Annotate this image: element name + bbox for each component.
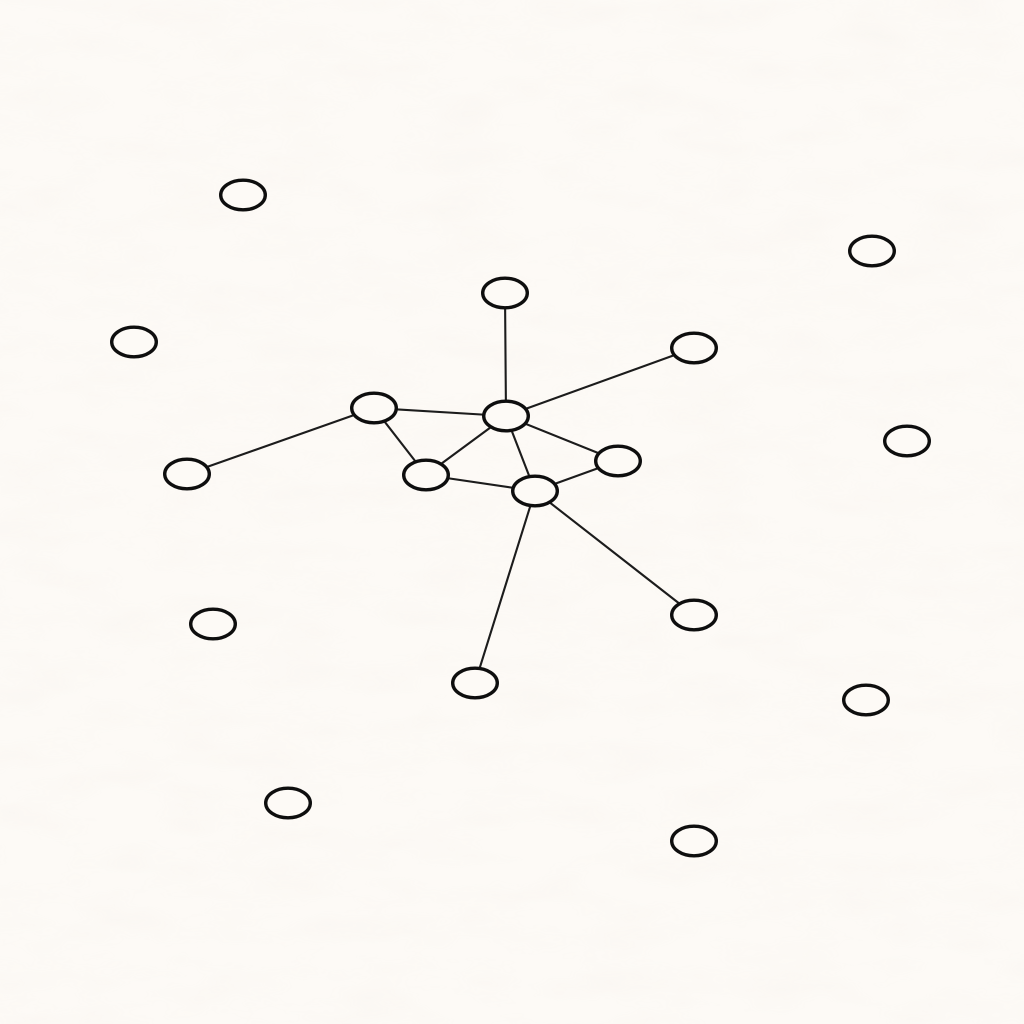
edges between connected nodes [187, 293, 694, 683]
nodes [112, 180, 929, 856]
